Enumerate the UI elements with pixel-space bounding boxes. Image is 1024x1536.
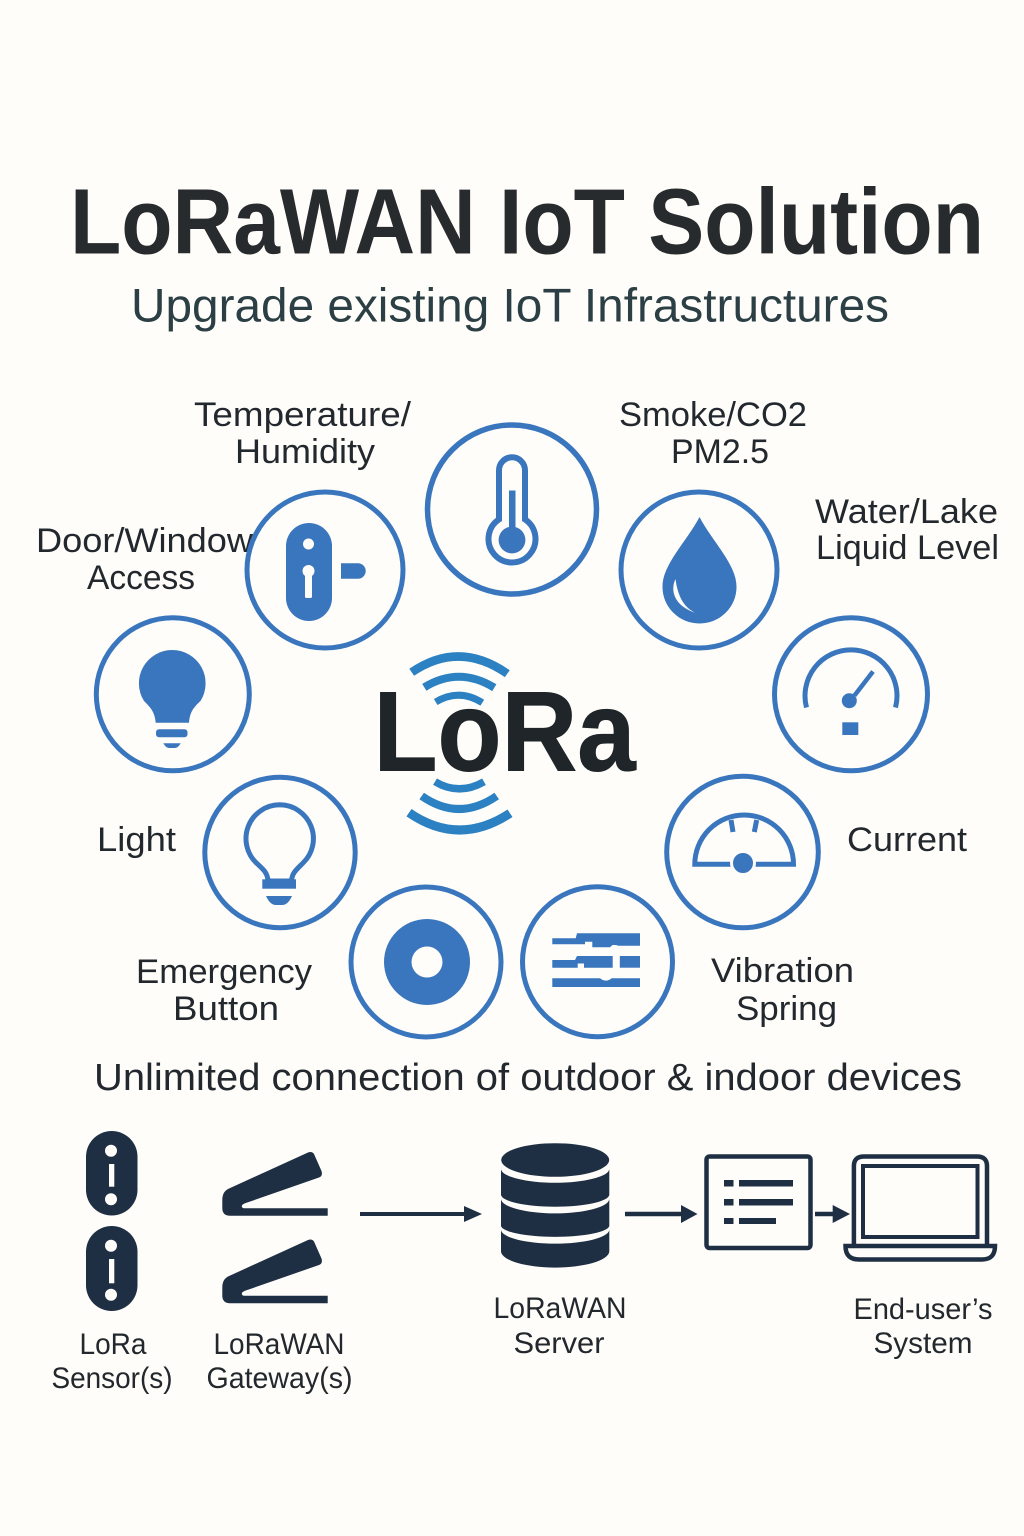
label: smoke co2 [619, 396, 807, 471]
label: door window: Access [87, 559, 195, 597]
label: vibration spring: Spring [736, 990, 837, 1028]
icon: laptop [846, 1156, 995, 1260]
label: LoRa sensors: LoRa [80, 1328, 147, 1361]
icon: water drop [621, 492, 777, 648]
LoRa logo: LoRa [374, 668, 637, 794]
icon: door sensor [247, 492, 403, 648]
label: current: Current [847, 821, 968, 859]
label: server: Server [514, 1327, 605, 1360]
LoRa logo [374, 656, 637, 830]
arrow: server to dashboard [625, 1205, 698, 1223]
label: door window: Door/Window [36, 522, 253, 560]
label: light: Light [97, 821, 177, 859]
label: end-user system: End-user’s [854, 1293, 992, 1326]
label: temperature humidity: Temperature/ [194, 396, 412, 434]
arrow: gateway to server [360, 1206, 482, 1222]
icon: dashboard list [706, 1156, 810, 1248]
label: smoke co2: Smoke/CO2 [619, 396, 807, 434]
label: LoRa sensors: Sensor(s) [52, 1362, 172, 1395]
icon: gauge [774, 618, 928, 771]
label: water level: Water/Lake [815, 493, 998, 531]
label: door window [36, 522, 253, 597]
label: end-user system: System [874, 1327, 972, 1360]
label: temperature humidity [194, 396, 412, 471]
subtitle: Upgrade existing IoT Infrastructures [131, 279, 889, 332]
label: LoRa sensors [52, 1328, 172, 1395]
label: gateways: LoRaWAN [214, 1328, 344, 1361]
label: gateways [206, 1328, 352, 1395]
icon: thermometer [428, 425, 596, 594]
icon: meter [667, 776, 818, 928]
label: emergency button [136, 953, 312, 1028]
icon: LoRa sensors [86, 1131, 138, 1311]
icon: database server [501, 1143, 609, 1268]
label: vibration spring: Vibration [711, 952, 854, 990]
label: gateways: Gateway(s) [206, 1362, 352, 1395]
icon: gateways [222, 1152, 328, 1303]
label: temperature humidity: Humidity [235, 433, 375, 471]
label: server: LoRaWAN [494, 1292, 626, 1325]
icon: solid bulb [96, 618, 249, 771]
arrow: dashboard to laptop [815, 1205, 850, 1223]
label: smoke co2: PM2.5 [671, 433, 769, 471]
tagline: Unlimited connection of outdoor & indoor devices [94, 1057, 962, 1099]
label: server [494, 1292, 626, 1360]
label: vibration spring [711, 952, 854, 1028]
label: water level: Liquid Level [816, 529, 999, 567]
label: emergency button: Emergency [136, 953, 312, 991]
label: end-user system [854, 1293, 992, 1360]
icon: emergency button [351, 887, 501, 1037]
icon: outline bulb [205, 777, 355, 928]
label: emergency button: Button [173, 990, 279, 1028]
icon: vibration [522, 887, 672, 1037]
label: water level [815, 493, 999, 567]
